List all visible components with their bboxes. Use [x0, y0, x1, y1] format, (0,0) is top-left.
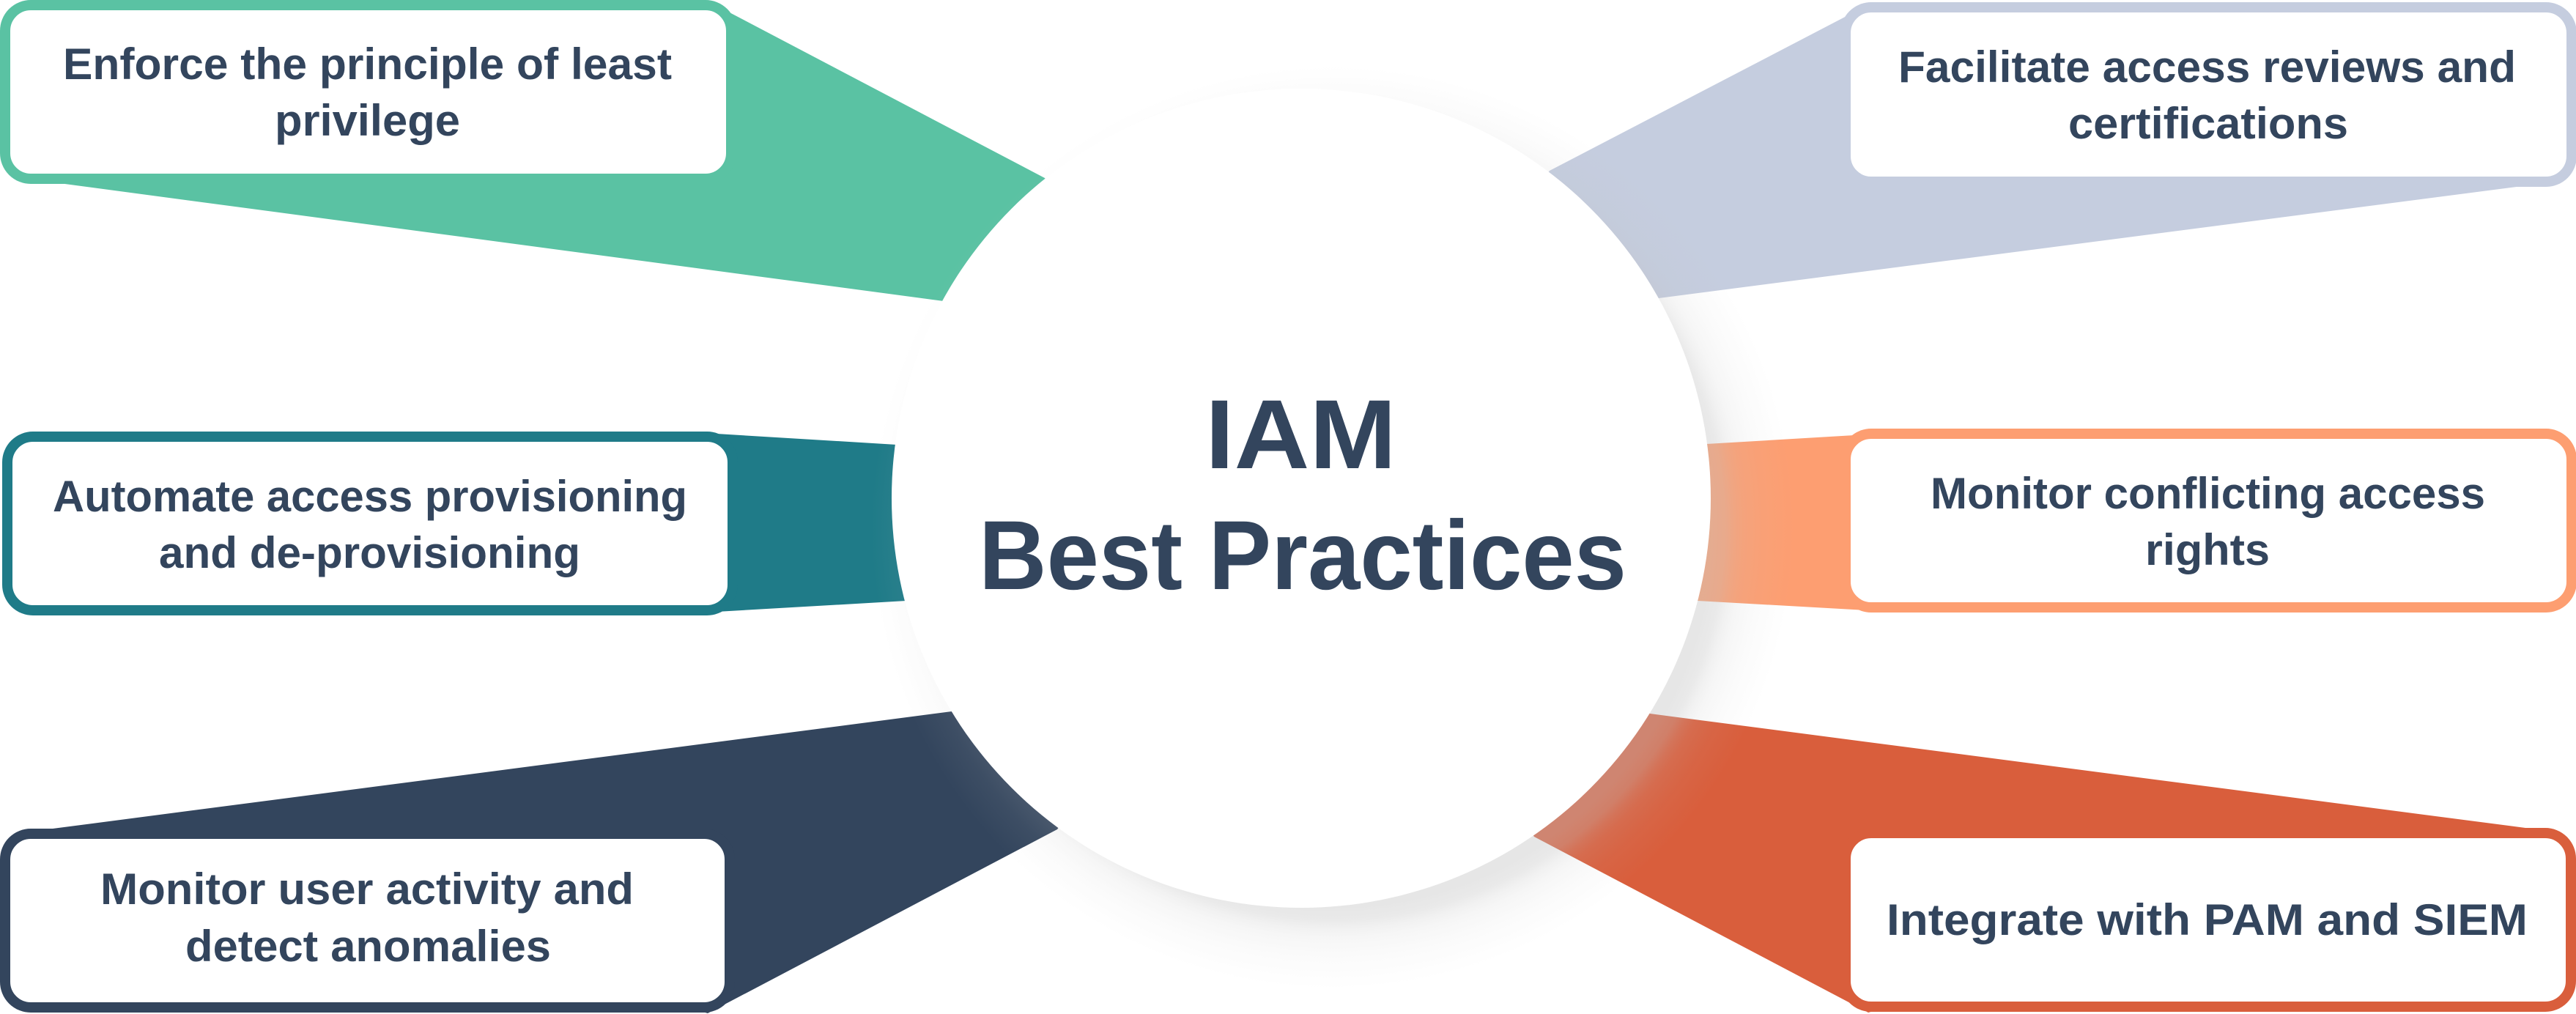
label: access reviews: certifications — [2068, 99, 2348, 148]
card: orange outlined box — [1846, 434, 2572, 607]
label: conflicting access: Monitor conflicting access — [1931, 469, 2485, 518]
wedge: slate connector — [1301, 14, 2517, 498]
label: enforce least privilege: Enforce the principle of least — [63, 40, 672, 89]
wedge: orange connector — [1301, 435, 1867, 610]
label: conflicting access: rights — [2145, 525, 2270, 574]
panel: automate provisioning — [7, 434, 1301, 612]
label: monitor user activity: Monitor user activity and — [100, 865, 634, 914]
card: teal outlined box — [7, 437, 733, 610]
title: IAM Best Practices: Best Practices — [979, 501, 1626, 610]
circle drop shadow — [871, 66, 1794, 989]
label: automate provisioning: Automate access provisioning — [53, 472, 687, 521]
wedge: green connector — [59, 10, 1301, 498]
card: green outlined box — [5, 5, 731, 179]
panel: monitor user activity — [5, 498, 1301, 1013]
label: access reviews: Facilitate access reviews and — [1898, 42, 2516, 92]
title: IAM Best Practices: IAM — [1205, 380, 1396, 489]
label: automate provisioning: and de-provisioning — [159, 528, 580, 577]
panel: access reviews — [1301, 7, 2572, 498]
central circle with title — [871, 66, 1794, 989]
card: navy outlined box — [5, 834, 730, 1007]
card: red outlined box — [1846, 833, 2571, 1007]
wedge: teal connector — [717, 434, 1301, 612]
label: enforce least privilege: privilege — [275, 96, 460, 145]
white circle — [892, 89, 1711, 908]
wedge: red connector — [1301, 498, 2525, 1013]
label: monitor user activity: detect anomalies — [185, 922, 551, 971]
panel: enforce least privilege — [5, 5, 1301, 498]
panel: integrate PAM and SIEM — [1301, 498, 2571, 1013]
card: slate outlined box — [1846, 7, 2572, 182]
label: integrate PAM and SIEM: Integrate with PAM and SIEM — [1887, 895, 2528, 944]
wedge: navy connector — [53, 498, 1301, 1013]
panel: conflicting access — [1301, 434, 2572, 610]
